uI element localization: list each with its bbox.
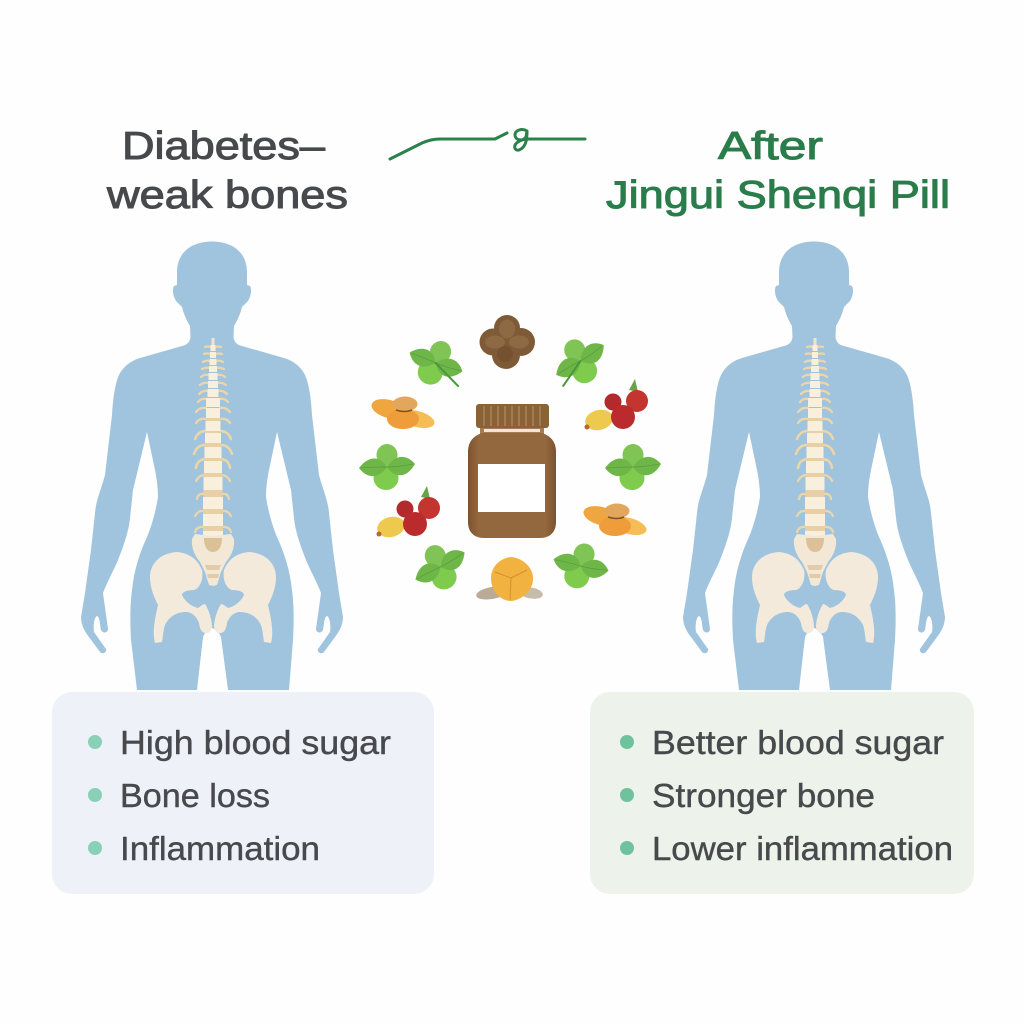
list item: lower inflammation: Lower inflammation: [652, 830, 953, 867]
title: after Jingui Shenqi Pill: After: [718, 125, 823, 168]
list item: stronger bone: Stronger bone: [652, 777, 875, 814]
jar label: [478, 464, 545, 512]
panel: before treatment symptoms: [52, 692, 434, 894]
title: diabetes weak bones: weak bones: [106, 174, 348, 217]
icon: red berries right: [583, 379, 648, 433]
icon: medicine jar: [468, 404, 556, 538]
icon: herb leaf top right: [545, 327, 616, 394]
icon: herb leaf right: [605, 444, 661, 490]
icon: brown seed cluster: [480, 315, 535, 369]
list item: high blood sugar: High blood sugar: [120, 724, 391, 761]
icon: herb leaf bottom left: [405, 534, 476, 600]
title: after Jingui Shenqi Pill: [606, 125, 950, 217]
list item: inflammation: Inflammation: [120, 830, 320, 867]
list item: bone loss: Bone loss: [120, 777, 270, 814]
icon: yellow nut with seeds: [475, 557, 544, 602]
icon: orange pod left: [369, 396, 436, 431]
icon: herb leaf bottom right: [547, 536, 614, 596]
icon: herb leaf top left: [401, 331, 472, 396]
icon: orange pod right: [581, 503, 648, 538]
panel: after treatment outcomes: [590, 692, 974, 894]
title: diabetes weak bones: [106, 125, 348, 217]
title: diabetes weak bones: Diabetes–: [122, 125, 325, 168]
icon: red berries left: [375, 486, 440, 540]
title: after Jingui Shenqi Pill: Jingui Shenqi Pill: [606, 174, 950, 217]
figure: body before treatment: [81, 242, 343, 690]
figure: body after treatment: [683, 242, 945, 690]
icon: herb leaf left: [359, 444, 415, 490]
list item: better blood sugar: Better blood sugar: [652, 724, 944, 761]
arrow: green squiggle connector: [390, 130, 585, 159]
